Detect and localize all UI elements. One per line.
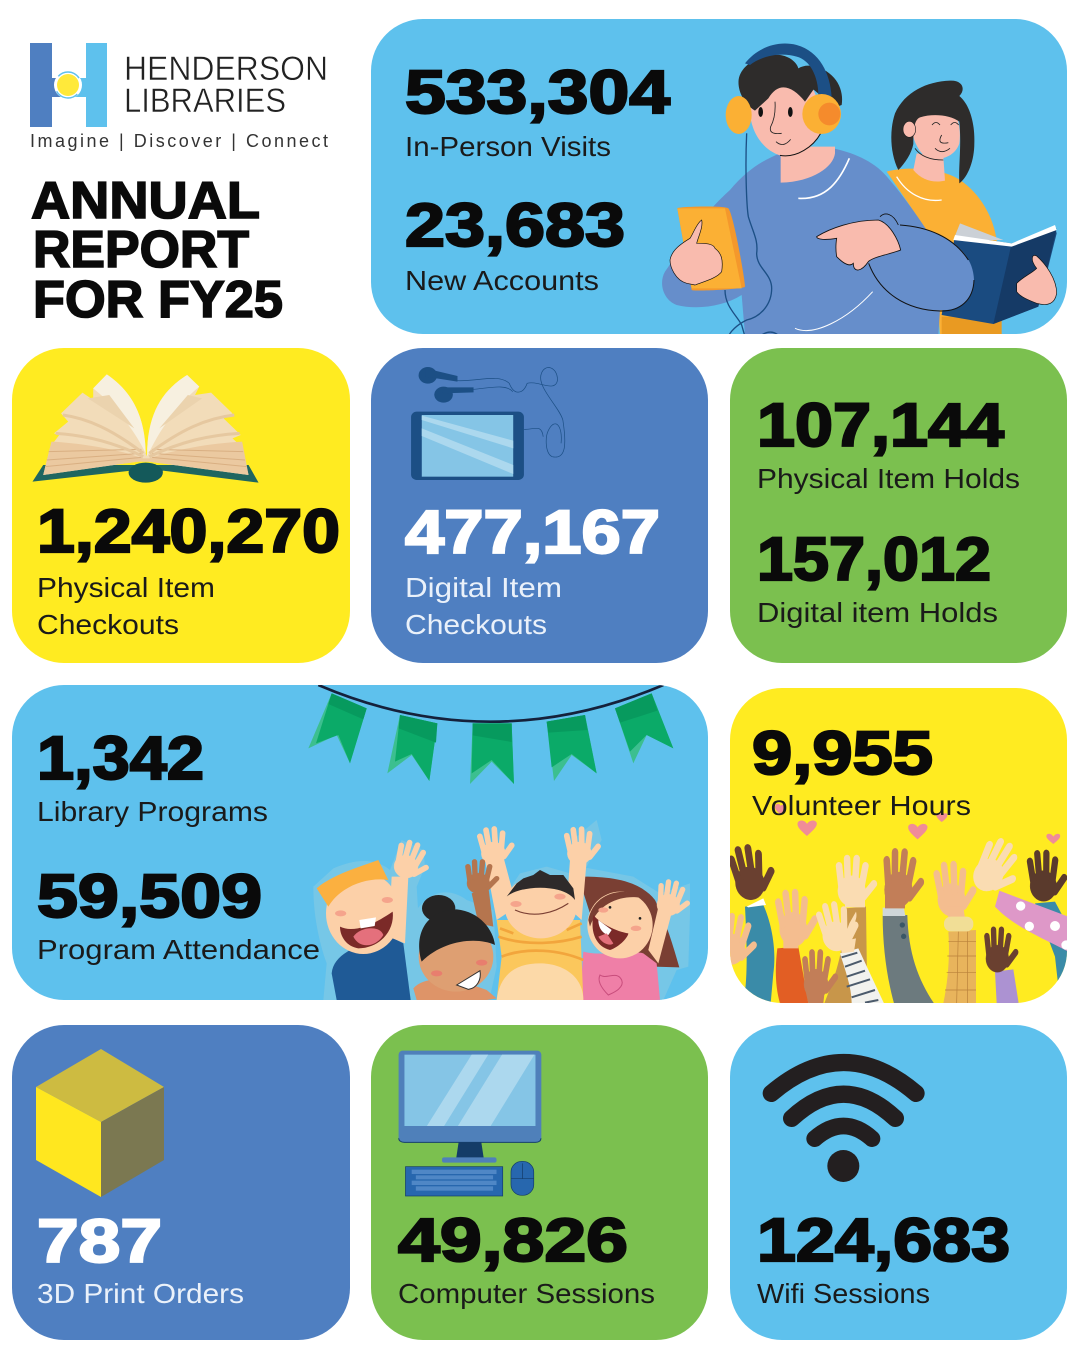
headphones <box>745 44 832 97</box>
stat: new accounts: New Accounts <box>405 265 599 296</box>
stat: 3D Print Orders <box>37 1278 244 1309</box>
book <box>942 227 1057 324</box>
stat <box>752 719 971 821</box>
bunting flags <box>308 693 673 784</box>
stat: 124,683 <box>757 1206 1010 1274</box>
icon: desktop computer <box>399 1051 541 1196</box>
stat: library programs: 1,342 <box>37 724 204 792</box>
stat: 49,826 <box>398 1206 628 1274</box>
logo mark: H <box>30 43 107 127</box>
illustration: raised hands <box>716 804 1071 1003</box>
stat <box>37 497 340 640</box>
halo shadows <box>313 820 690 1000</box>
title: ANNUAL <box>31 172 260 230</box>
stat: program attendance: 59,509 <box>37 862 262 930</box>
tagline: Imagine | Discover | Connect <box>30 131 328 151</box>
panel: digital item checkouts <box>371 348 708 663</box>
phone <box>677 207 745 291</box>
stat: library programs: Library Programs <box>37 796 268 827</box>
title: FOR FY25 <box>33 271 283 329</box>
stat: Computer Sessions <box>398 1278 655 1309</box>
panel: physical item checkouts <box>12 348 350 663</box>
stat: physical item holds: Physical Item Holds <box>757 463 1020 494</box>
logo: Henderson Libraries <box>30 43 328 151</box>
stat: Physical Item <box>37 572 215 603</box>
man hands <box>670 220 722 285</box>
icon: wifi <box>771 1062 916 1182</box>
stat: new accounts: 23,683 <box>405 191 625 259</box>
icon: open book <box>32 374 259 483</box>
logo: Henderson Libraries: LIBRARIES <box>124 82 286 120</box>
left hands <box>730 912 757 965</box>
child 3 <box>478 827 600 1000</box>
child 4 girl <box>578 877 690 1000</box>
stat: Checkouts <box>37 609 179 640</box>
stat: 1,240,270 <box>37 497 340 565</box>
stat: library programs <box>37 724 268 827</box>
pink sleeve <box>973 838 1018 892</box>
panel: visits and accounts <box>371 19 1067 337</box>
stat: 787 <box>37 1207 162 1275</box>
striped sleeve <box>840 948 884 1003</box>
panel: wifi sessions <box>730 1025 1067 1340</box>
title <box>31 172 283 329</box>
title: REPORT <box>33 221 249 279</box>
stat: physical item holds: 107,144 <box>757 391 1004 459</box>
lilac sleeve small dark hand <box>995 969 1019 1003</box>
stat <box>37 1207 244 1309</box>
stat: Digital Item <box>405 572 562 603</box>
stat: new accounts <box>405 191 625 296</box>
child 1 boy <box>317 840 432 1000</box>
panel: volunteer hours <box>716 688 1071 1003</box>
stat: in-person visits <box>405 58 670 162</box>
stat: digital item holds <box>757 525 998 628</box>
stat <box>757 1206 1010 1309</box>
stat: 9,955 <box>752 719 933 787</box>
stat: digital item holds: 157,012 <box>757 525 991 593</box>
stat <box>398 1206 655 1309</box>
hearts <box>775 804 1060 844</box>
plaid sleeve <box>943 930 976 1003</box>
man body <box>662 148 974 335</box>
stat: Checkouts <box>405 609 547 640</box>
grey sleeve <box>883 915 934 1003</box>
stat: program attendance: Program Attendance <box>37 934 320 965</box>
stat: Wifi Sessions <box>757 1278 930 1309</box>
panel: holds <box>730 348 1067 663</box>
stat: 477,167 <box>405 498 660 566</box>
stat: in-person visits: In-Person Visits <box>405 131 611 162</box>
logo wordmark: HENDERSON <box>124 50 328 88</box>
stat: digital item holds: Digital item Holds <box>757 597 998 628</box>
right hand of woman <box>1017 255 1057 305</box>
orange sleeve <box>776 947 808 1003</box>
stat <box>405 498 660 640</box>
stat: physical item holds <box>757 391 1020 494</box>
icon: tablet and earbuds <box>411 367 565 480</box>
stat: in-person visits: 533,304 <box>405 58 670 126</box>
icon: cube <box>36 1049 164 1197</box>
panel: computer sessions <box>371 1025 708 1340</box>
panel: programs <box>12 685 708 1000</box>
stat: program attendance <box>37 862 320 965</box>
woman <box>887 169 1002 335</box>
back sleeves <box>824 907 867 1003</box>
cable <box>725 133 780 337</box>
stat: Volunteer Hours <box>752 790 971 821</box>
illustration: bunting and children <box>308 685 690 1000</box>
illustration: man with headphones and woman reading <box>662 44 1057 337</box>
child 2 <box>413 862 497 1000</box>
man neck and head <box>781 147 835 183</box>
panel: 3D print orders <box>12 1025 350 1340</box>
